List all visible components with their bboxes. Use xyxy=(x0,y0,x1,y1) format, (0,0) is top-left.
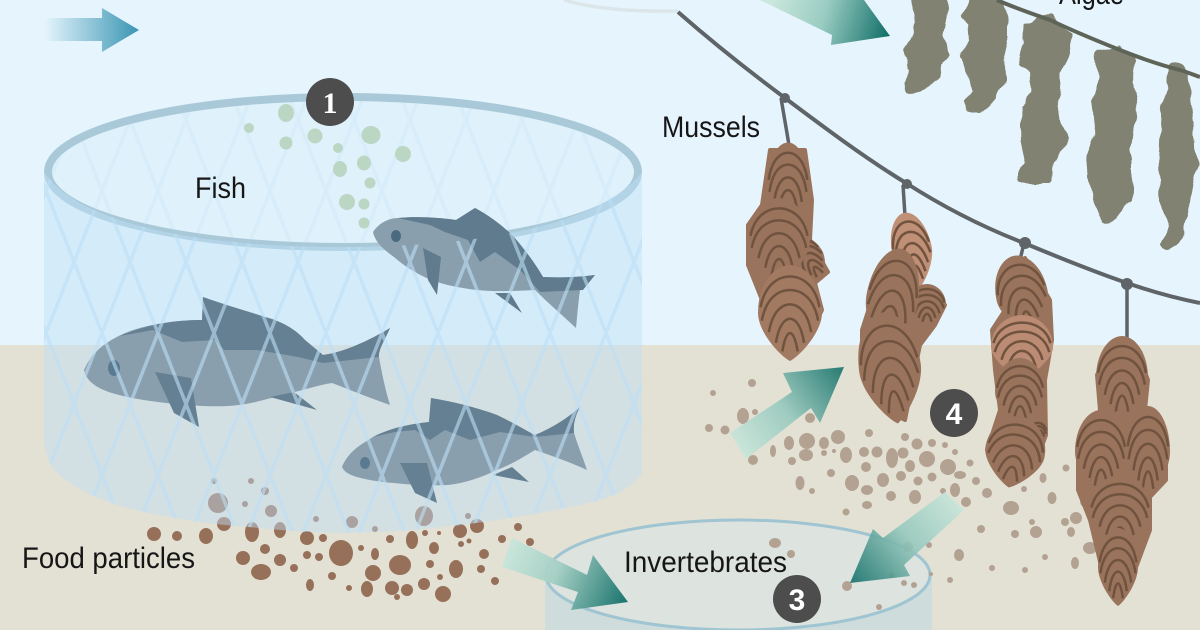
badge 3 xyxy=(773,575,821,623)
badge 4 xyxy=(930,389,978,437)
rope: mussel line xyxy=(678,12,1200,342)
fish: lower xyxy=(342,398,587,503)
mussel cluster 4 xyxy=(1075,336,1170,606)
food particles xyxy=(147,478,534,602)
badge 3: 3 xyxy=(789,584,805,617)
net ring back xyxy=(48,97,638,247)
algae strands xyxy=(906,0,1194,249)
badge 4: 4 xyxy=(946,398,963,431)
fish: large xyxy=(84,297,390,427)
mussel cluster 3 xyxy=(979,250,1056,493)
arrow: particles to invertebrates xyxy=(850,492,964,583)
arrow: particles to mussels xyxy=(730,367,844,459)
label: Food particles: Food particles xyxy=(22,542,195,575)
ring interior mesh xyxy=(52,101,634,243)
arc: previous tank rim xyxy=(564,0,678,11)
fish: top right xyxy=(373,208,595,328)
panel: invertebrates tub xyxy=(545,520,932,630)
badge 1: 1 xyxy=(322,87,338,120)
badge 1 xyxy=(306,78,354,126)
net cage body xyxy=(44,172,642,533)
waste particles from mussels xyxy=(705,379,1097,610)
mussel cluster 1 xyxy=(748,142,836,361)
label: Fish: Fish xyxy=(195,172,246,205)
arrow: food to invertebrates xyxy=(502,538,628,610)
label: Invertebrates: Invertebrates xyxy=(624,546,787,579)
water background xyxy=(0,0,1200,346)
rope: algae line xyxy=(997,0,1200,77)
mussel cluster 2 xyxy=(852,209,946,428)
label: Mussels: Mussels xyxy=(662,111,760,144)
arrow: water current xyxy=(44,8,139,52)
arrow: nutrients to algae xyxy=(760,0,890,45)
dissolved nutrients xyxy=(244,104,411,228)
seabed background xyxy=(0,345,1200,630)
net mesh lines xyxy=(44,172,642,533)
